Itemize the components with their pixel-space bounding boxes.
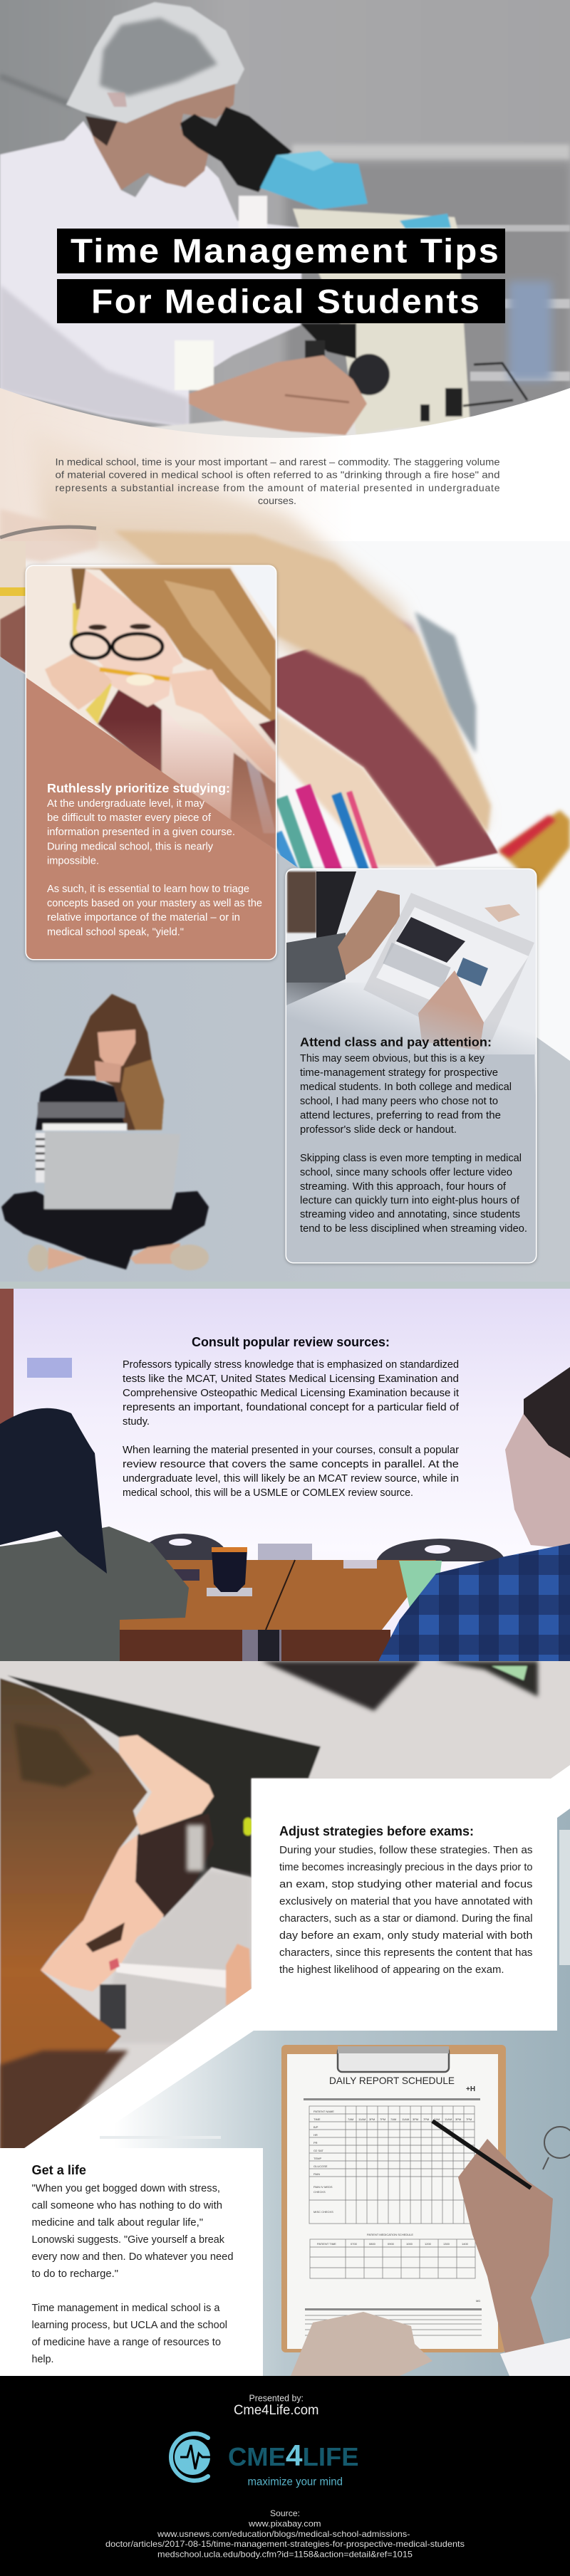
panel text: help.: [31, 2353, 54, 2365]
panel text: exclusively on material that you have annotated with: [279, 1895, 533, 1907]
card text: concepts based on your mastery as well as the: [47, 898, 262, 909]
photo: chairs: [138, 1534, 229, 1560]
panel: clipboard photo: GLUCOSE: [314, 2164, 328, 2168]
photo: brick wall: [0, 1289, 14, 1428]
panel: clipboard photo: 1200: [425, 2242, 432, 2246]
card heading: Ruthlessly prioritize studying:: [47, 781, 230, 795]
card text: streaming video and annotating, since students: [300, 1209, 520, 1220]
panel: clipboard photo: PATIENT TIME: [317, 2242, 336, 2246]
panel heading: Get a life: [31, 2163, 86, 2177]
panel: clipboard photo: O2 SAT: [314, 2149, 323, 2152]
section text: Professors typically stress knowledge that is emphasized on standardized: [123, 1358, 459, 1371]
man: hair net: [66, 2, 244, 123]
panel: clipboard photo: PATIENT MEDICATION SCHEDULE: [367, 2233, 413, 2236]
panel: clipboard photo: PAIN IV MEDS: [314, 2185, 333, 2189]
section text: medical school, this will be a USMLE or COMLEX review source.: [123, 1487, 413, 1499]
panel: clipboard photo: 0900: [388, 2242, 395, 2246]
card text: At the undergraduate level, it may: [47, 798, 205, 810]
icon: heartbeat ring: [171, 2434, 214, 2481]
card text: Skipping class is even more tempting in medical: [300, 1153, 522, 1164]
card text: attend lectures, preferring to read from the: [300, 1110, 501, 1121]
panel: clipboard photo: HR: [314, 2133, 318, 2137]
card text: information presented in a given course.: [47, 827, 235, 838]
man: lab coat: [0, 121, 301, 427]
panel: hero photo: [0, 0, 570, 438]
panel: consult popular review sources: [0, 1289, 570, 1661]
right hand holding pen: [458, 2139, 553, 2354]
photo: table: [120, 1560, 436, 1630]
panel: clipboard photo: 11AM: [402, 2117, 409, 2121]
panel: clipboard photo: PATIENT NAME: [314, 2110, 334, 2113]
card heading: Attend class and pay attention:: [300, 1035, 492, 1049]
panel text: to do to recharge.": [31, 2268, 118, 2280]
sources: medschool.ucla.edu/body.cfm?id=1158&action=detail&ref=1015: [157, 2549, 413, 2559]
panel heading: Adjust strategies before exams:: [279, 1824, 474, 1838]
panel text: an exam, stop studying other material and focus: [279, 1878, 533, 1890]
card text: lecture can quickly turn into eight-plus hours of: [300, 1195, 520, 1206]
sources: doctor/articles/2017-08-15/time-management-strategies-for-prospective-medical-students: [105, 2539, 465, 2549]
card text: medical school speak, "yield.": [47, 927, 184, 938]
panel: footer: [0, 2376, 570, 2576]
card text: This may seem obvious, but this is a key: [300, 1053, 485, 1064]
section text: review resource that covers the same concepts in parallel. At the: [123, 1458, 459, 1470]
panel: clipboard photo: B/P: [314, 2125, 318, 2129]
card text: school, I had many peers who chose not to: [300, 1096, 498, 1107]
logo tagline: maximize your mind: [248, 2476, 343, 2488]
card text: professor's slide deck or handout.: [300, 1124, 457, 1136]
panel text: [279, 1844, 533, 1976]
panel text: Lonowski suggests. "Give yourself a break: [31, 2234, 224, 2246]
section text: Comprehensive Osteopathic Medical Licensing Examination because it: [123, 1387, 460, 1399]
panel text: [31, 2182, 234, 2365]
panel: adjust strategies before exams: [252, 1765, 570, 2031]
panel: clipboard photo: MISC CHECKS: [314, 2210, 333, 2214]
panel: clipboard photo: 3PM: [413, 2117, 418, 2121]
card text: During medical school, this is nearly: [47, 842, 214, 853]
sheet title: DAILY REPORT SCHEDULE: [329, 2075, 455, 2086]
panel: attend class and pay attention: [286, 869, 536, 1264]
title: [57, 229, 505, 323]
schedule grid: [309, 2106, 475, 2278]
intro text block: [56, 456, 500, 506]
section text: [123, 1358, 460, 1499]
panel text: "When you get bogged down with stress,: [31, 2182, 220, 2194]
photo: mugs: [207, 1588, 252, 1596]
logo: [171, 2434, 359, 2488]
panel: clipboard photo: TEMP: [314, 2157, 321, 2160]
card photo: student biting pencil: [25, 565, 278, 959]
card text: be difficult to master every piece of: [47, 812, 212, 824]
section text: study.: [123, 1415, 150, 1428]
section text: undergraduate level, this will likely be an MCAT review source, while in: [123, 1472, 459, 1485]
title bar one: [57, 229, 505, 273]
presented by: Presented by:: [249, 2394, 304, 2404]
panel text: time becomes increasingly precious in the days prior to: [279, 1861, 533, 1873]
card text: tend to be less disciplined when streaming video.: [300, 1223, 527, 1235]
card text: school, since many schools offer lecture video: [300, 1167, 512, 1178]
panel: clipboard photo: 11AM: [445, 2117, 452, 2121]
card text: relative importance of the material – or in: [47, 912, 240, 923]
intro text block: courses.: [258, 495, 296, 506]
panel: clipboard photo: 1400: [462, 2242, 469, 2246]
panel text: learning process, but UCLA and the school: [31, 2319, 227, 2331]
panel: intro background photo: [0, 388, 570, 891]
intro text block: In medical school, time is your most important – and rarest – commodity. The staggering volume: [56, 456, 500, 467]
panel: clipboard photo: PAIN: [314, 2172, 320, 2176]
panel: clipboard photo: 7PM: [380, 2117, 385, 2121]
panel: lower grey background: [0, 656, 570, 1289]
brand url: Cme4Life.com: [234, 2403, 319, 2418]
panel: clipboard photo: TIME: [314, 2117, 321, 2121]
section heading: Consult popular review sources:: [192, 1335, 390, 1349]
photo: woman from behind: [0, 1527, 189, 1661]
panel: clipboard photo: 7PM: [423, 2117, 429, 2121]
man: face: [86, 83, 235, 190]
microscope body: [293, 209, 470, 435]
panel text: of medicine have a range of resources to: [31, 2336, 221, 2348]
panel: clipboard photo: CHECKS: [314, 2190, 326, 2194]
section text: tests like the MCAT, United States Medical Licensing Examination and: [123, 1373, 459, 1385]
panel: clipboard photo: 3PM: [455, 2117, 461, 2121]
intro text block: represents a substantial increase from the amount of material presented in undergraduate: [56, 482, 500, 493]
panel: get a life: [0, 2148, 263, 2376]
card text: [300, 1053, 527, 1235]
panel text: Time management in medical school is a: [31, 2302, 220, 2314]
card text: time-management strategy for prospective: [300, 1067, 498, 1079]
sources: [105, 2508, 465, 2559]
panel: clipboard photo: [100, 1808, 570, 2376]
microscope eyepieces: [180, 107, 292, 192]
clipboard: [281, 2045, 506, 2352]
panel: clipboard photo: 1300: [443, 2242, 450, 2246]
title line two: For Medical Students: [91, 282, 481, 320]
panel text: characters, since this represents the content that has: [279, 1947, 533, 1959]
glasses: [544, 2127, 570, 2158]
card text: As such, it is essential to learn how to triage: [47, 884, 249, 895]
card photo: tablet: [286, 869, 536, 1264]
panel: exam photo: [0, 1658, 570, 2170]
panel text: day before an exam, only study material with both: [279, 1930, 533, 1942]
report sheet: [287, 2054, 498, 2349]
panel: clipboard photo: 7AM: [390, 2117, 396, 2121]
panel: clipboard photo: 3PM: [369, 2117, 375, 2121]
panel text: the highest likelihood of appearing on the exam.: [279, 1964, 504, 1976]
panel text: call someone who has nothing to do with: [31, 2199, 222, 2211]
card text: medical students. In both college and medical: [300, 1082, 512, 1093]
illustration: woman sitting with laptop: [1, 994, 209, 1272]
intro text block: of material covered in medical school is often referred to as "drinking through a fire hose" and: [56, 468, 500, 480]
panel: ruthlessly prioritize studying: [25, 565, 278, 959]
panel: clipboard photo: 11AM: [358, 2117, 366, 2121]
title line one: Time Management Tips: [71, 232, 500, 269]
title bar two: [57, 279, 505, 323]
panel text: medicine and talk about regular life,": [31, 2216, 203, 2229]
sources: www.usnews.com/education/blogs/medical-school-admissions-: [157, 2529, 410, 2539]
photo: man from behind: [505, 1388, 570, 1549]
sources: Source:: [270, 2508, 300, 2518]
clip: [338, 2048, 449, 2072]
section text: represents an important, foundational concept for a particular field of: [123, 1401, 460, 1413]
panel text: every now and then. Do whatever you need: [31, 2251, 234, 2263]
panel: clipboard photo: 0700: [351, 2242, 358, 2246]
panel: clipboard photo: 0800: [369, 2242, 376, 2246]
panel: clipboard photo: 7AM: [434, 2117, 440, 2121]
card text: [47, 798, 262, 938]
logo wordmark: CME4LIFE: [228, 2439, 359, 2472]
panel: clipboard photo: +H: [466, 2085, 475, 2093]
photo: wall sign: [27, 1358, 72, 1378]
panel: clipboard photo: MD: [476, 2299, 480, 2303]
sources: www.pixabay.com: [248, 2519, 321, 2529]
card text: impossible.: [47, 856, 99, 867]
panel: clipboard photo: PR: [314, 2141, 318, 2145]
panel: clipboard photo: 1000: [406, 2242, 413, 2246]
card text: streaming. With this approach, four hours of: [300, 1181, 507, 1193]
panel text: During your studies, follow these strategies. Then as: [279, 1844, 533, 1856]
panel: clipboard photo: 7PM: [466, 2117, 472, 2121]
man: hand: [189, 355, 367, 435]
section text: When learning the material presented in your courses, consult a popular: [123, 1444, 459, 1456]
panel text: characters, such as a star or diamond. During the final: [279, 1912, 533, 1925]
panel: clipboard photo: 7AM: [348, 2117, 353, 2121]
left hand: [291, 2312, 432, 2376]
